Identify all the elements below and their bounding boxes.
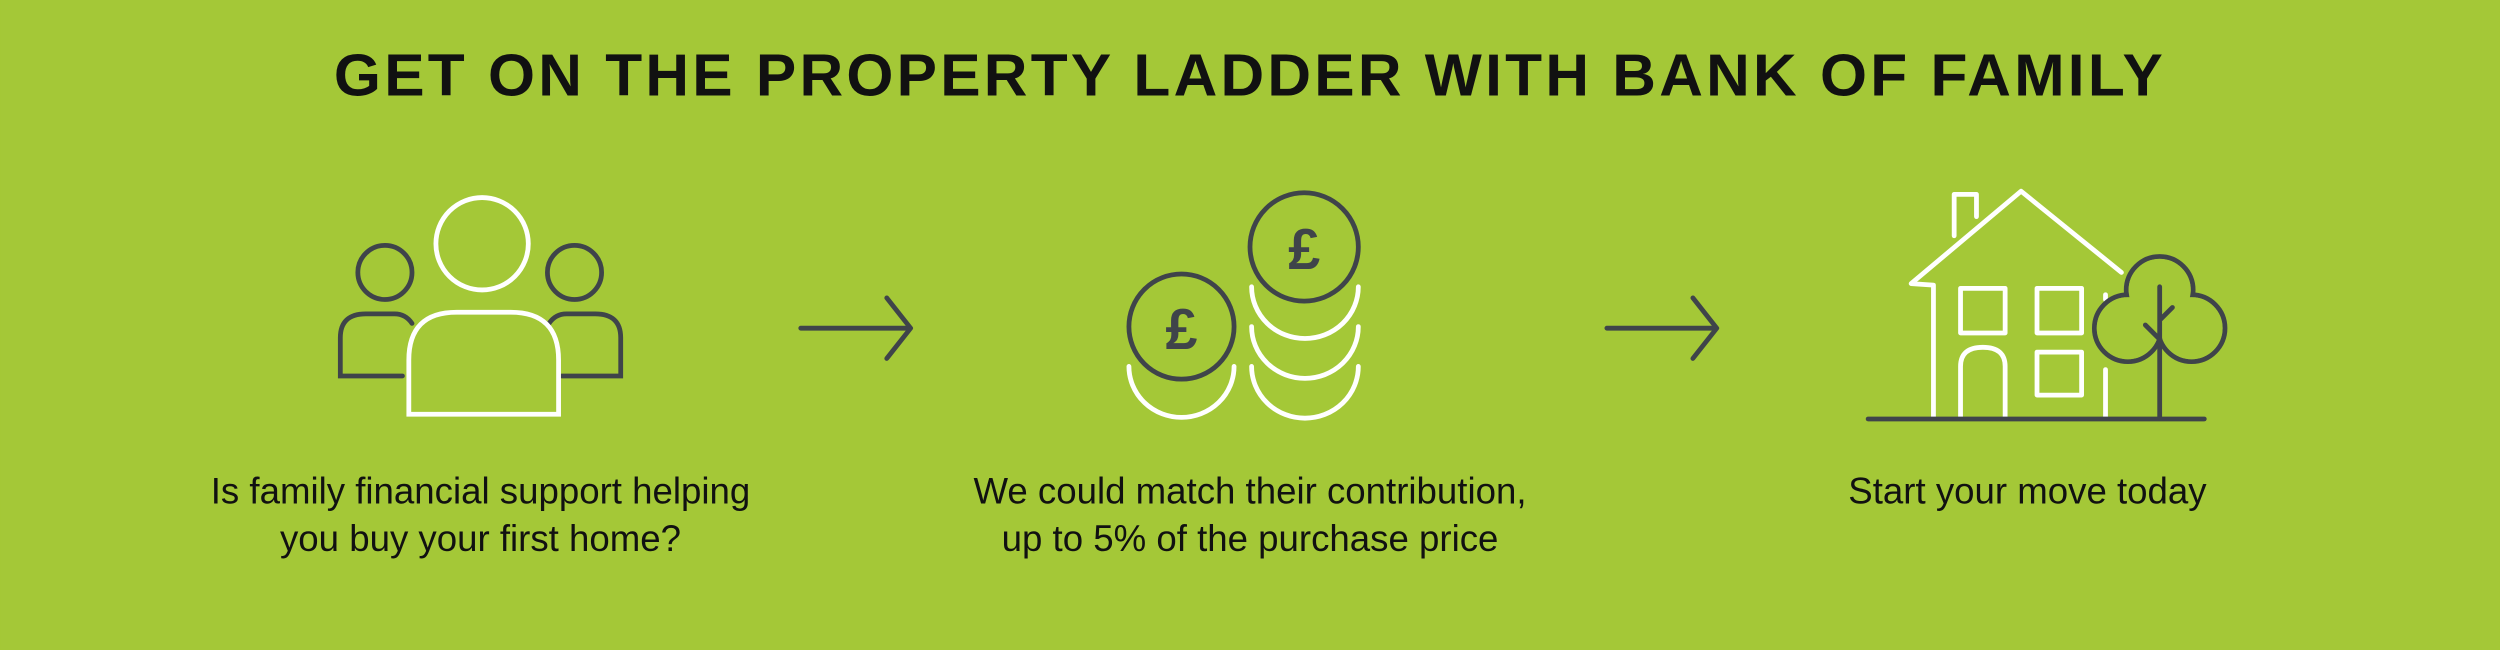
- text: step 2: [973, 470, 1527, 559]
- text: step 1: you buy your first home?: [280, 518, 681, 559]
- arrow 1: [801, 298, 911, 358]
- text: step 2: up to 5% of the purchase price: [1002, 518, 1498, 559]
- text: step 1: Is family financial support helping: [211, 470, 750, 511]
- text: step 2: We could match their contribution,: [973, 470, 1527, 511]
- title: GET ON THE PROPERTY LADDER WITH BANK OF FAMILY: [334, 44, 2166, 109]
- text: step 3: Start your move today: [1848, 470, 2207, 511]
- icon: coins: £: [1166, 298, 1198, 362]
- icon: coins: £: [1288, 218, 1320, 282]
- icon: coins: [1129, 193, 1358, 418]
- icon: family: [340, 198, 621, 414]
- text: step 1: [211, 470, 750, 559]
- arrow 2: [1607, 298, 1717, 358]
- icon: house and tree: [1868, 191, 2225, 419]
